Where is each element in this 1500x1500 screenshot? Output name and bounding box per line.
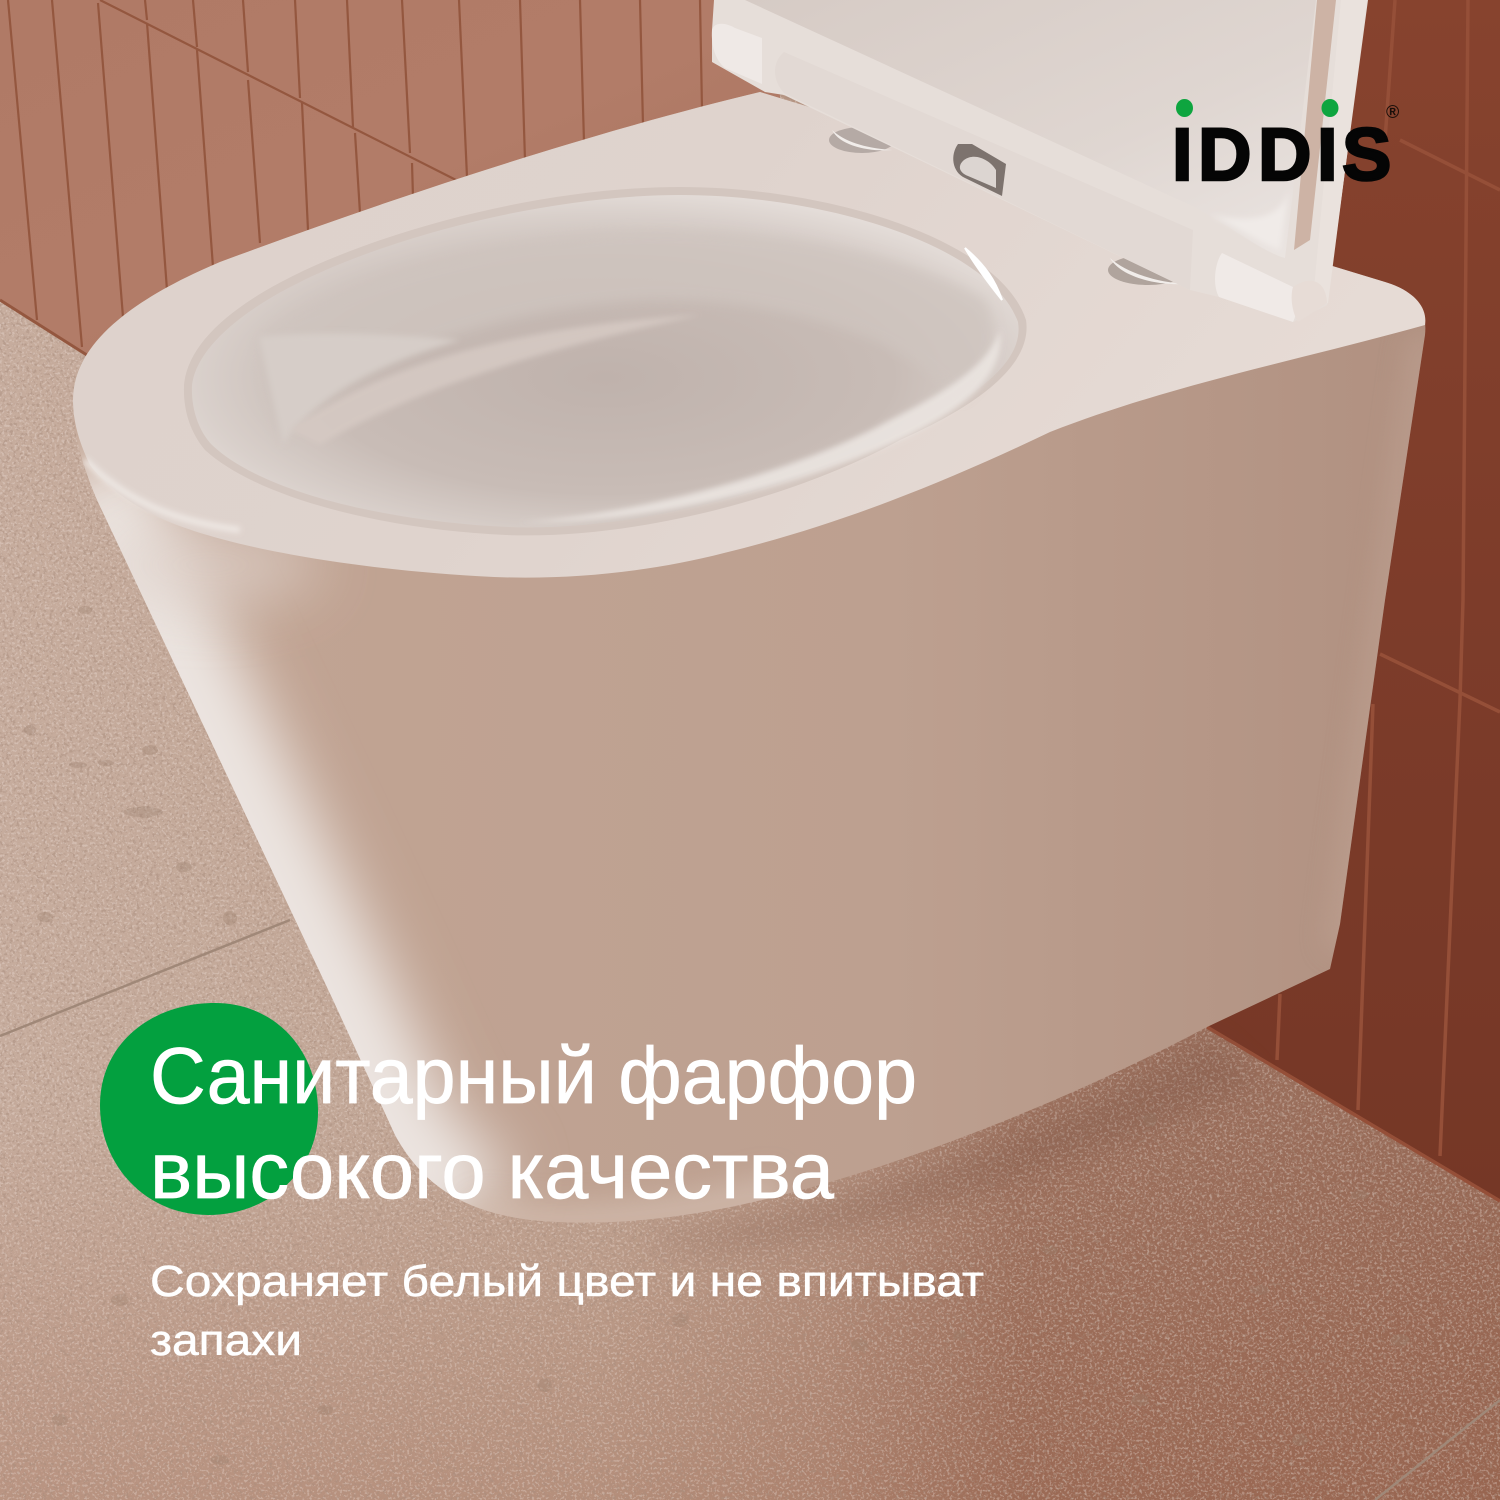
bowl opening [184,187,1027,535]
heading: Санитарный фарфор [150,1031,917,1120]
subheading text: запахи [150,1316,302,1365]
rim lip highlight [85,460,240,530]
background: left tiled wall [0,0,780,357]
bowl inner shading [259,231,1002,522]
logo wordmark: IDDIS [1172,113,1391,196]
toilet rim [73,92,1425,578]
left edge highlight [85,470,470,1215]
logo: IDDIS [1172,99,1399,196]
subheading text [150,1257,984,1365]
logo registered mark: ® [1386,102,1399,122]
lid inner panel [745,0,1316,258]
subheading text: Сохраняет белый цвет и не впитыват [150,1257,984,1306]
heading: высокого качества [150,1126,834,1215]
chrome button [953,144,1006,196]
heading [150,1031,917,1215]
logo green dots [1176,99,1338,117]
chrome hinge mounts [829,127,1188,285]
toilet [60,0,1440,1240]
toilet body [60,80,1440,1240]
hinge bar [775,52,1193,290]
background: right terracotta wall [1207,0,1500,1201]
seat lid [712,0,1368,322]
soft floor shadow beside toilet [640,1035,1260,1247]
lid side strips [1294,0,1336,250]
green blob accent [100,1003,318,1215]
